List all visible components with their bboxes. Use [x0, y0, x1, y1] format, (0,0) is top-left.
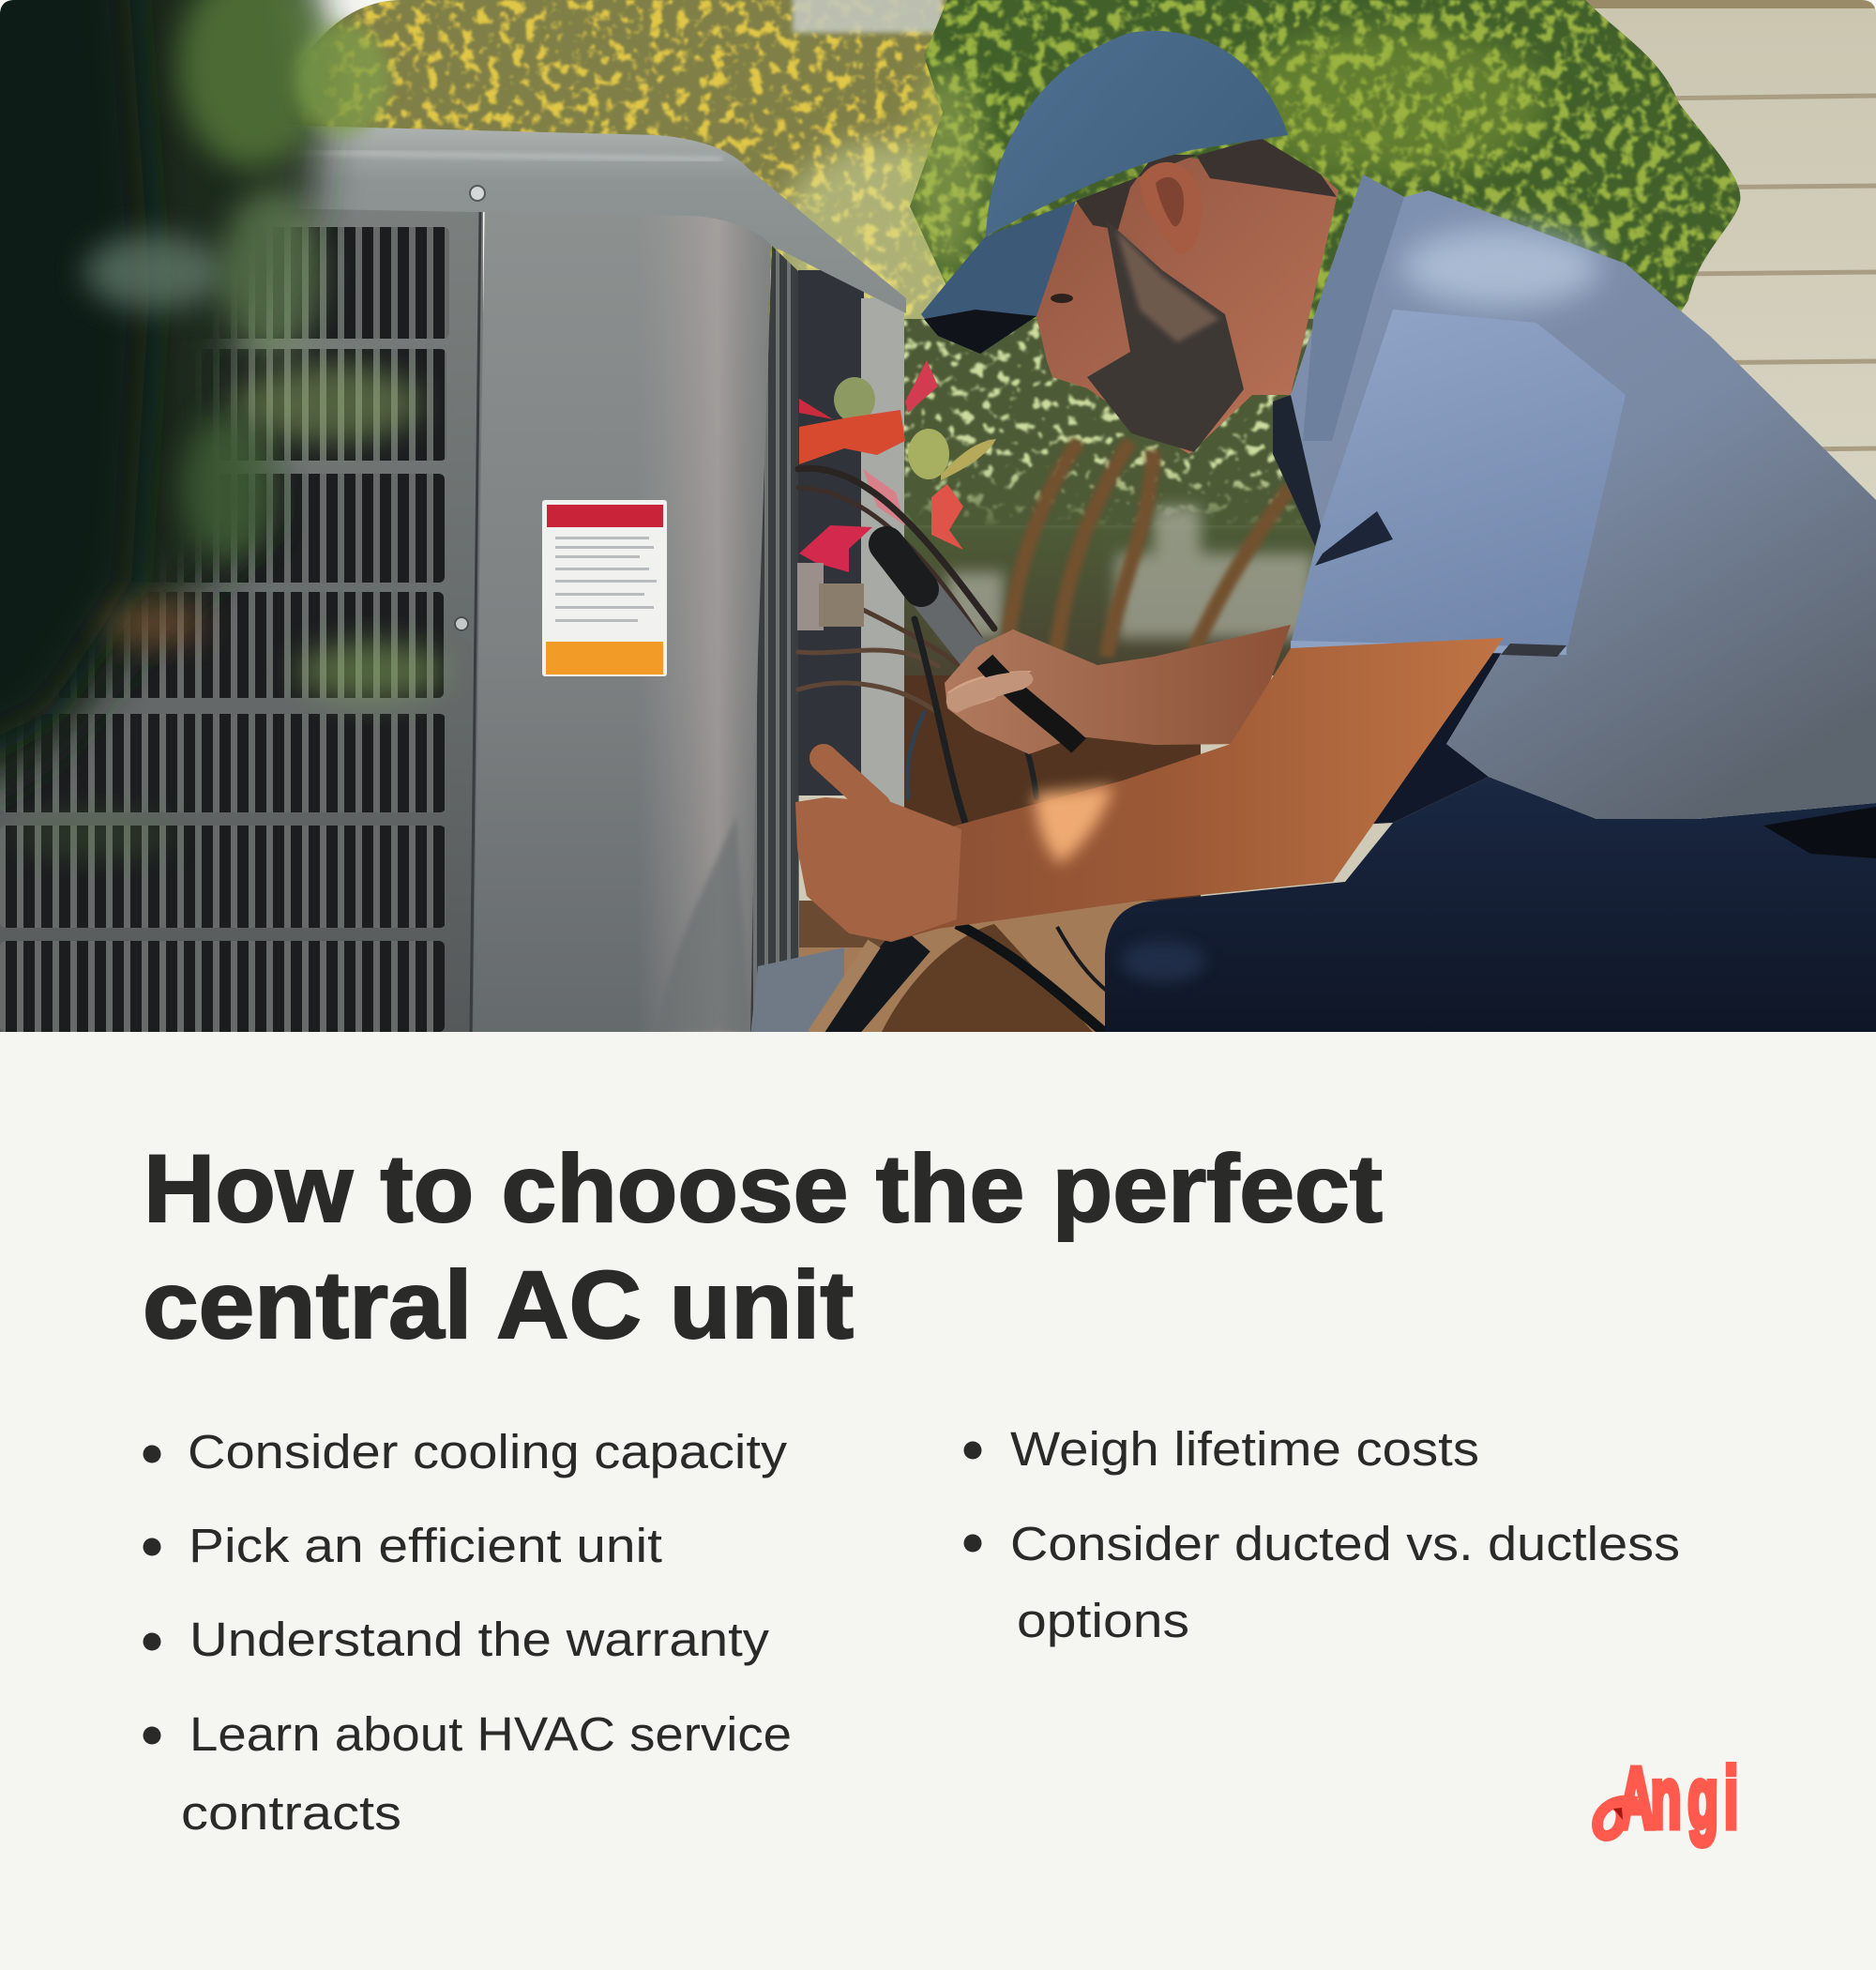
item: service contracts: Learn about HVAC service	[189, 1707, 792, 1761]
shirt body	[1291, 174, 1876, 819]
item: ducted vs ductless: options	[1017, 1594, 1189, 1647]
yellow-green shrub behind AC unit	[296, 0, 947, 341]
green hedge behind technician	[902, 0, 1741, 319]
side panel	[473, 188, 772, 1032]
neck and face	[1010, 158, 1339, 454]
louver rows	[0, 227, 449, 1032]
beard	[1087, 220, 1244, 452]
item: ducted vs ductless: Consider ducted vs. ductless	[1010, 1517, 1680, 1570]
mulch ground	[741, 675, 1201, 1032]
hair	[1076, 138, 1337, 230]
far hand dark cables	[985, 661, 1079, 746]
sleeve dark fold	[1315, 511, 1393, 566]
title	[143, 1135, 1383, 1358]
dark shadow under arm	[1341, 644, 1506, 826]
near hand	[795, 758, 961, 942]
cap	[986, 31, 1288, 236]
item: cooling capacity: Consider cooling capacity	[188, 1425, 788, 1478]
item: efficient unit: Pick an efficient unit	[189, 1519, 662, 1572]
house siding background	[767, 0, 1876, 901]
technician	[795, 31, 1876, 1032]
hoses, wood plank and concrete on the ground	[750, 924, 1109, 1037]
tool handle	[914, 580, 986, 664]
shoulder light patch	[1402, 228, 1599, 307]
photo: technician servicing an outdoor AC condenser	[0, 0, 1876, 1037]
trousers	[1105, 777, 1876, 1032]
far arm and hand	[945, 625, 1291, 754]
item: lifetime costs: Weigh lifetime costs	[1010, 1422, 1479, 1476]
title: How to choose the perfect	[144, 1135, 1383, 1242]
Angi logo: Angi	[1618, 1750, 1738, 1846]
near arm	[891, 638, 1504, 942]
top lid	[263, 125, 906, 313]
rating label sticker	[542, 500, 667, 676]
contactor	[797, 563, 824, 630]
AC condenser unit	[0, 125, 906, 1032]
item: service contracts	[143, 1707, 792, 1840]
item: warranty: Understand the warranty	[189, 1613, 770, 1666]
item: ducted vs ductless	[964, 1517, 1680, 1647]
red flowers and buds	[799, 360, 996, 572]
open service cavity	[798, 270, 864, 796]
bullet list: left column	[143, 1425, 792, 1840]
cap brim	[921, 201, 1076, 354]
blurred foreground foliage	[0, 0, 446, 858]
belt	[1763, 807, 1876, 858]
eye	[1051, 294, 1073, 303]
side louvers	[750, 246, 799, 1032]
ear	[1140, 162, 1202, 254]
lower shrub with trunks	[900, 319, 1323, 675]
shirt sleeve	[1291, 310, 1626, 651]
grille front panel	[0, 202, 483, 1032]
item: service contracts: contracts	[181, 1786, 401, 1840]
title: central AC unit	[143, 1251, 854, 1358]
screws	[470, 186, 485, 201]
collar	[1303, 174, 1404, 441]
bullet list: right column	[964, 1422, 1680, 1647]
wires and coil tool	[797, 468, 1036, 826]
